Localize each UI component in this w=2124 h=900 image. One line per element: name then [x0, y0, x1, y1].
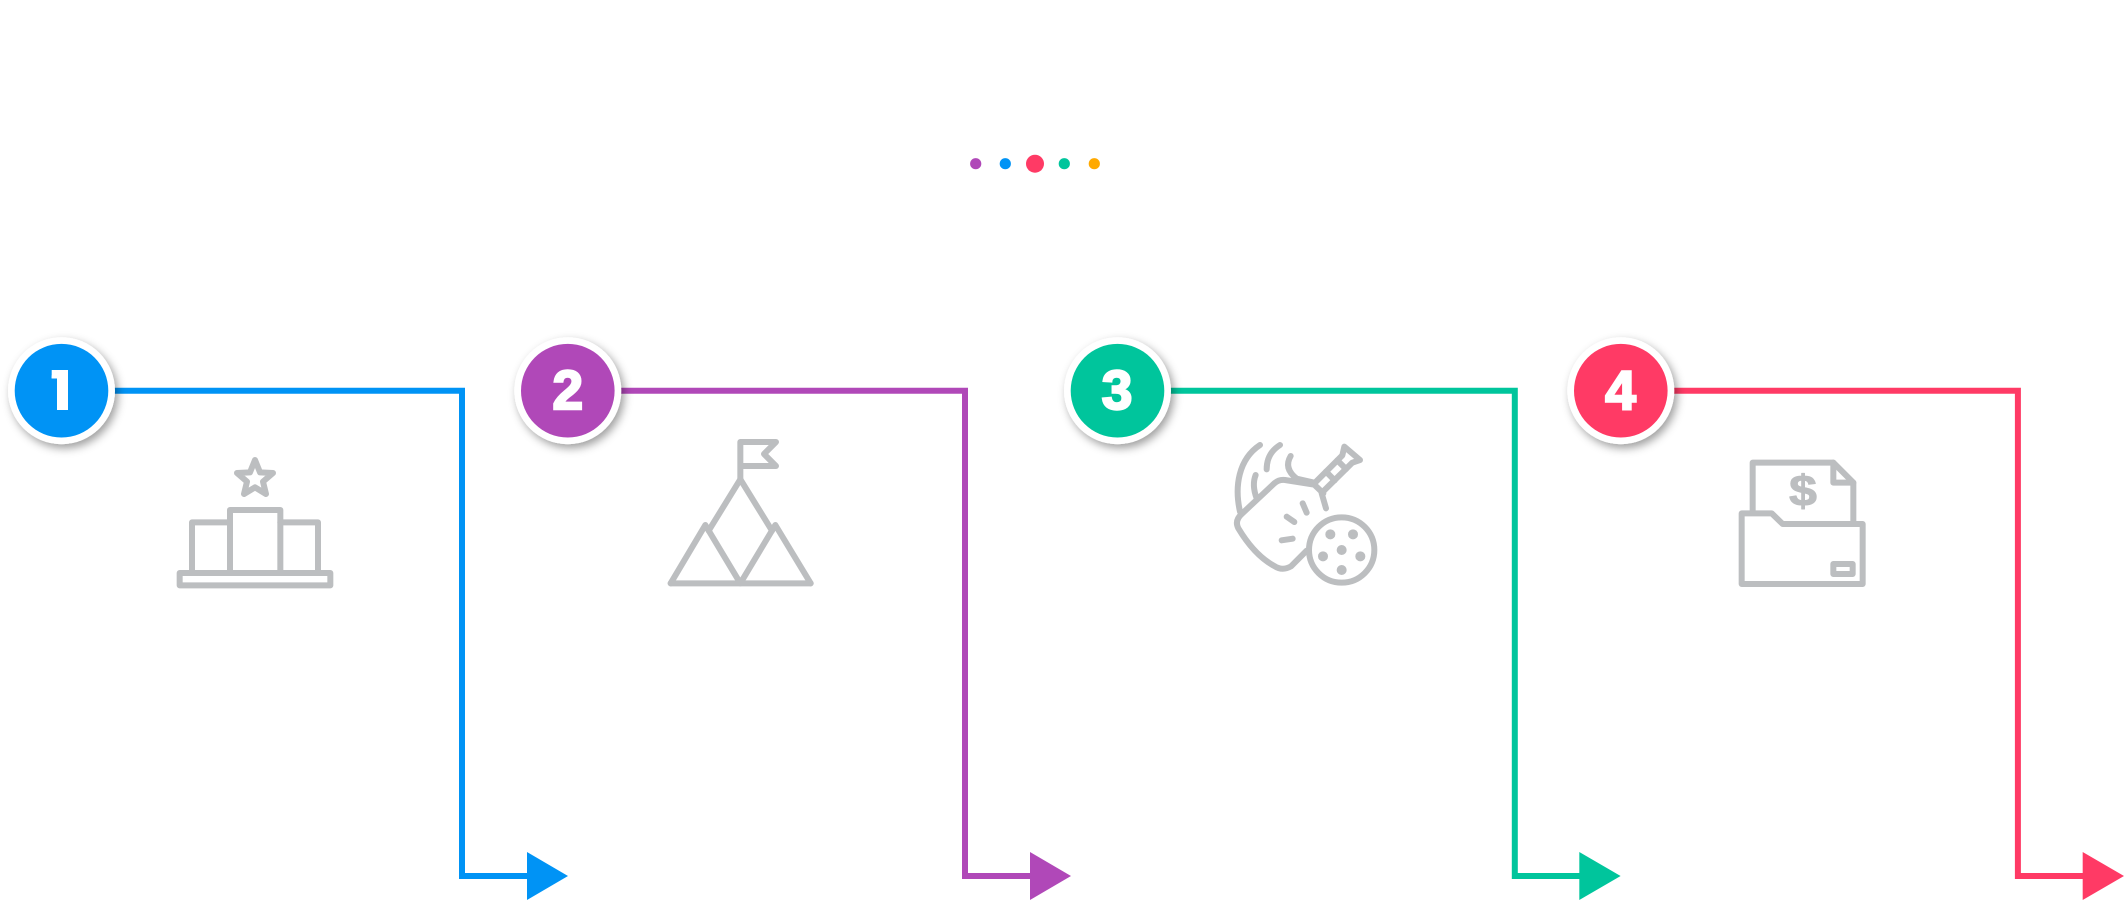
decorative dots row	[970, 155, 1100, 173]
icon: folder with invoice: $	[1789, 467, 1817, 515]
arrow: step 4 connector	[1621, 391, 2124, 900]
icon: golf club and ball	[1237, 445, 1374, 583]
step 3 number badge	[1064, 337, 1171, 444]
panel: step 1	[8, 337, 568, 900]
step 1 number badge	[8, 337, 115, 444]
step 3 number badge: 3	[1102, 359, 1132, 421]
icon: mountain with flag	[671, 442, 811, 583]
panel: step 2	[514, 337, 1071, 900]
step 2 number badge	[514, 337, 621, 444]
icon: podium with star	[180, 460, 330, 585]
arrow: step 2 connector	[568, 391, 1071, 900]
icon: folder with invoice	[1742, 463, 1863, 584]
arrow: step 3 connector	[1118, 391, 1621, 900]
panel: step 4	[1567, 337, 2124, 900]
step 2 number badge: 2	[553, 359, 583, 421]
step 4 number badge	[1567, 337, 1674, 444]
panel: step 3	[1064, 337, 1621, 900]
arrow: step 1 connector	[61, 391, 568, 900]
step 1 number badge: 1	[45, 360, 76, 422]
step 4 number badge: 4	[1605, 359, 1636, 421]
